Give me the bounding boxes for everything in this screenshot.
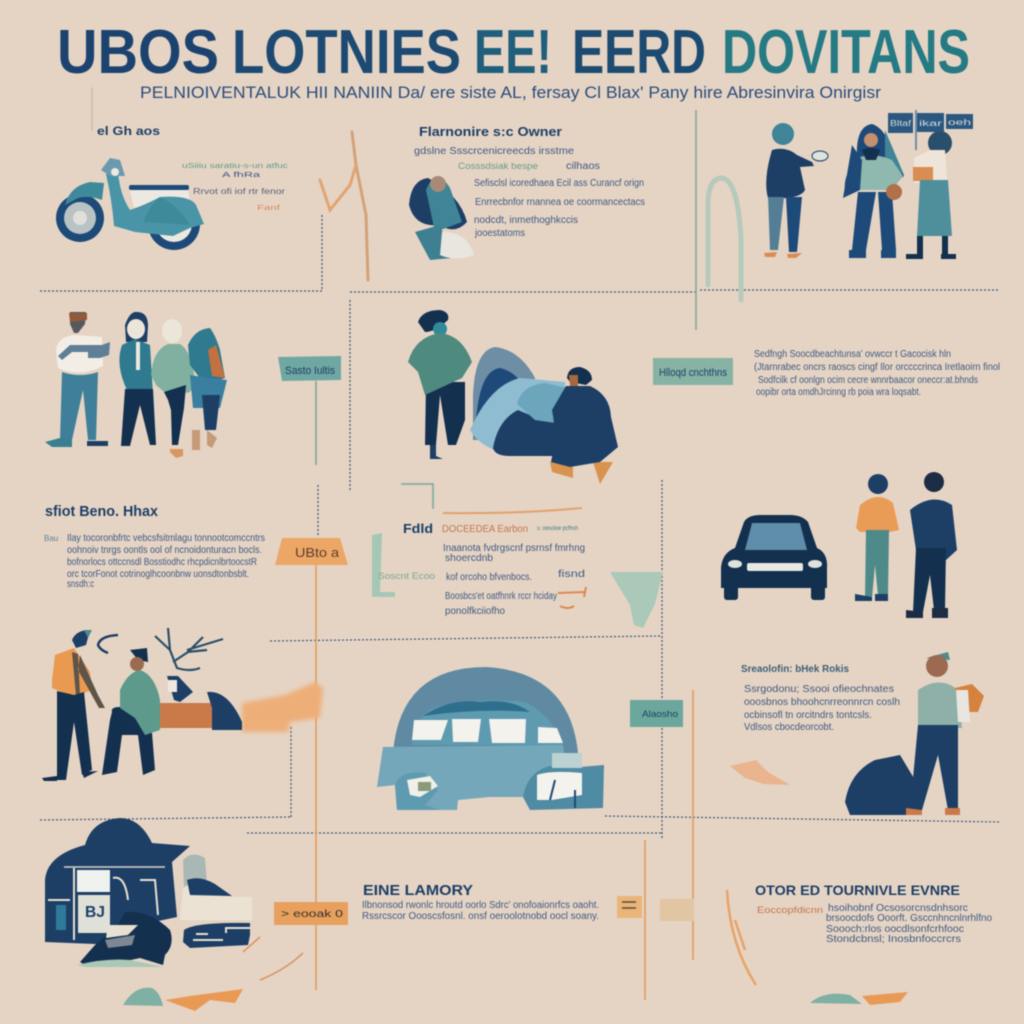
text block: Enrrecbnfor rnannea oe coormancectacs	[475, 197, 645, 208]
paragraph: snsdh:c	[67, 579, 94, 590]
sign strip: oeh	[948, 118, 971, 127]
person: middle	[843, 124, 904, 258]
person: seated dark cloak	[550, 367, 618, 484]
mound highlight	[106, 925, 138, 938]
paragraph: Ilay tocoronbfrtc vebcsfsitmlagu tonnootcomccntrs	[67, 533, 265, 544]
text block: row 3 centre: s: oesoloe pcfhsh	[537, 525, 578, 532]
tag: teal	[630, 700, 683, 727]
tag: orange: UBto a	[295, 545, 340, 560]
paragraph: Bau	[44, 534, 58, 543]
icon: tent back	[473, 347, 535, 440]
person: standing green	[408, 310, 472, 459]
paragraph: Ilbnonsod rwonlc hroutd oorlo Sdrc' onofoaionrfcs oaoht.	[362, 900, 599, 911]
text block: row 5 centre	[362, 882, 599, 922]
person: left	[764, 123, 828, 258]
heading: sfiot Beno. Hhax	[45, 503, 159, 520]
sign: teal left	[278, 356, 341, 381]
paragraph: brsoocdofs Ooorft. Gsccnhncnlnrhlfno	[826, 913, 992, 924]
icon: bird	[167, 676, 193, 702]
text block: nodcdt, inmethoghkccis	[474, 215, 578, 226]
scooter notes: A fhRa	[222, 172, 260, 179]
bottom scrap right	[810, 992, 908, 1005]
text block: row 5 right	[755, 882, 992, 945]
sage funnel	[610, 572, 663, 628]
paragraph	[362, 900, 599, 922]
paragraph: Ssrgodonu; Ssooi ofieochnates	[744, 684, 894, 695]
decorative pins and arcs	[92, 88, 741, 508]
text block: right row 2: Sedfngh Soocdbeachtunsa' ovwccr t Gacocisk hln	[754, 349, 951, 360]
paragraph: ponolfkciiofho	[445, 606, 505, 617]
title	[57, 18, 970, 87]
panel: top-right three people	[764, 110, 973, 259]
panel: row 2 group of four	[45, 312, 227, 458]
sage scrap with label	[372, 533, 435, 597]
person: right	[888, 110, 973, 259]
paragraph: fisnd	[558, 569, 585, 580]
paragraph	[826, 903, 992, 945]
person: green seated	[102, 648, 160, 775]
house roof and body	[45, 818, 190, 945]
paragraph: bofnorlocs ottccnsdl Bosstiodhc rhcpdicnlbrtoocstR	[67, 557, 257, 568]
text block: row 3 centre: DOCEEDEA Earbon	[442, 524, 528, 535]
sign strip: Bltaf	[890, 119, 912, 128]
side window	[183, 854, 207, 888]
person: long hair	[188, 328, 227, 450]
paragraph: oohnoiv tnrgs oontls ool of ncnoidonturacn bocls.	[67, 545, 262, 556]
tag: teal: Alaosho	[642, 709, 678, 720]
orange scrap	[730, 760, 790, 785]
panel: traveller with bag	[730, 652, 984, 815]
person: traveller	[906, 652, 984, 815]
paragraph: hsoihobnf Ocsosorcnsdnhsorc	[828, 903, 968, 914]
icon: tent body	[470, 378, 568, 455]
scooter notes	[182, 163, 289, 212]
paragraph: ooosbnos bhoohcnrreonnrcn coslh	[744, 697, 900, 708]
icon: crescent	[98, 635, 118, 653]
text block: right row 2: (Jtarnrabec oncrs raoscs cingf Ilor orccccrinca Iretlaoirn finol	[754, 362, 1000, 373]
heading: EINE LAMORY	[363, 882, 473, 899]
paragraph: orc tcorFonot cotrinoglhcoonbnw uonsdtonbsblt.	[67, 569, 249, 580]
small orange marks	[558, 587, 586, 608]
text block: row 4 right	[741, 663, 900, 733]
door frames	[48, 868, 158, 940]
scooter notes: Rrvot ofi iof rtr fenor	[193, 186, 285, 196]
small tags	[617, 896, 694, 921]
lettering block	[56, 895, 110, 933]
paragraph: Boosbcs'et oatfhnrk rccr hciday	[445, 591, 557, 602]
cream box	[180, 882, 252, 920]
orange slab	[242, 682, 323, 732]
navy case	[183, 923, 250, 948]
panel: top centre text	[409, 124, 645, 260]
heading: Sreaolofin: bHek Rokis	[741, 663, 849, 675]
scooter notes: uSiiiu saratiu-s-un atfuc	[182, 163, 289, 170]
icon: bird face	[168, 680, 177, 692]
text block: jooestatoms	[474, 228, 525, 239]
tag: orange lower	[274, 902, 348, 925]
person: navy	[906, 472, 957, 618]
window	[77, 870, 110, 892]
icon: scooter	[56, 158, 204, 250]
tag: orange lower: > eooak 0	[281, 909, 344, 920]
person: teal jacket	[119, 312, 156, 446]
panel: row 4 left scene	[42, 628, 323, 781]
paragraph	[443, 543, 585, 617]
text block: right row 2	[754, 349, 1000, 398]
text block: Cosssdsiak bespe	[458, 161, 538, 172]
lettering block: BJ	[85, 904, 105, 921]
icon: bed	[160, 692, 242, 730]
icon: bare tree	[155, 628, 223, 670]
title: EERD	[572, 18, 706, 87]
heading: Fdld	[403, 521, 433, 536]
sign strip: ikar	[919, 119, 943, 128]
paragraph	[44, 533, 265, 590]
paragraph: Rssrcscor Oooscsfosnl. onsf oeroolotnobd oocl soany.	[362, 911, 599, 922]
heading: OTOR ED TOURNIVLE EVNRE	[755, 882, 960, 898]
heading rule	[443, 508, 582, 513]
orange swooshes	[727, 890, 756, 985]
paragraph: Vdlsos cbocdeorcobt.	[744, 722, 834, 733]
roof line	[64, 866, 165, 868]
paragraph: ocbinsofl tn orcitndrs tontcsls.	[744, 710, 872, 721]
paragraph: shoercdnb	[445, 553, 493, 564]
text block: row 3 left	[44, 503, 265, 590]
paragraph	[744, 684, 900, 733]
icon: navy car	[721, 515, 827, 600]
person: white shirt	[45, 312, 110, 447]
person: orange vest	[855, 474, 899, 601]
text block: gdslne Ssscrcenicreecds irsstme	[414, 146, 574, 157]
icon: blue car with arch	[377, 667, 604, 810]
person: sage jacket	[151, 319, 195, 458]
title: EE!	[474, 18, 552, 87]
paragraph: Inaanota fvdrgscnf psrnsf fmrhng	[443, 543, 585, 554]
paragraph: Soooch:rlos oocdlsonfcrhfooc	[826, 924, 964, 935]
panel: people and tent	[408, 310, 618, 484]
sage scrap with label: Soscnt Ecoo	[378, 571, 435, 581]
icon: tent inner	[476, 368, 520, 440]
paragraph: Stondcbnsl; Inosbnfoccrcrs	[826, 934, 961, 945]
sign strip	[888, 113, 973, 133]
text block: right row 2: Sodfcilk cf oonlgn ocim cecre wnnrbaacor oneccr:at.bhnds	[758, 375, 978, 386]
subtitle: PELNIOIVENTALUK HII NANIIN Da/ ere siste AL, fersay Cl Blax' Pany hire Abresinvira Onirgisr	[140, 83, 881, 102]
orange subhead: Eoccopfdicnn	[757, 905, 823, 916]
scooter label: el Gh aos	[97, 124, 160, 138]
icon: backpack pile	[845, 755, 915, 815]
title: UBOS	[57, 18, 219, 87]
panel: two people right	[855, 472, 957, 618]
orange strokes	[243, 937, 303, 980]
sign: teal right: Hlloqd cnchthns	[659, 367, 727, 379]
title: LOTNIES	[232, 18, 461, 87]
icon: tent door	[493, 410, 560, 456]
icon: hooded kneeling figure	[409, 176, 474, 260]
text block	[414, 146, 645, 239]
dark car roof	[187, 878, 232, 896]
icon: house scene	[45, 818, 252, 967]
text block: right row 2: oopibr orta omdhJrcinng rb poia wra loqsabt.	[756, 387, 921, 398]
bottom scrap left	[123, 988, 243, 1011]
tag: orange	[275, 538, 348, 565]
scooter notes: Fanf	[257, 205, 280, 212]
sign: teal left: Sasto Iultis	[285, 365, 335, 377]
icon: tent panel	[517, 383, 567, 424]
grey wedge	[105, 935, 135, 948]
text block: cilhaos	[566, 161, 600, 172]
sage ground	[77, 960, 163, 967]
sign: teal right	[653, 358, 733, 385]
panel: scooter	[56, 124, 289, 250]
front mound	[80, 912, 172, 965]
heading: Flarnonire s:c Owner	[419, 124, 562, 139]
text block: Sefisclsl icoredhaea Ecil ass Curancf orign	[474, 178, 644, 189]
paragraph: kof orcoho bfvenbocs.	[446, 572, 532, 583]
text block: row 3 centre	[372, 508, 663, 628]
person: orange vest left	[42, 630, 105, 781]
